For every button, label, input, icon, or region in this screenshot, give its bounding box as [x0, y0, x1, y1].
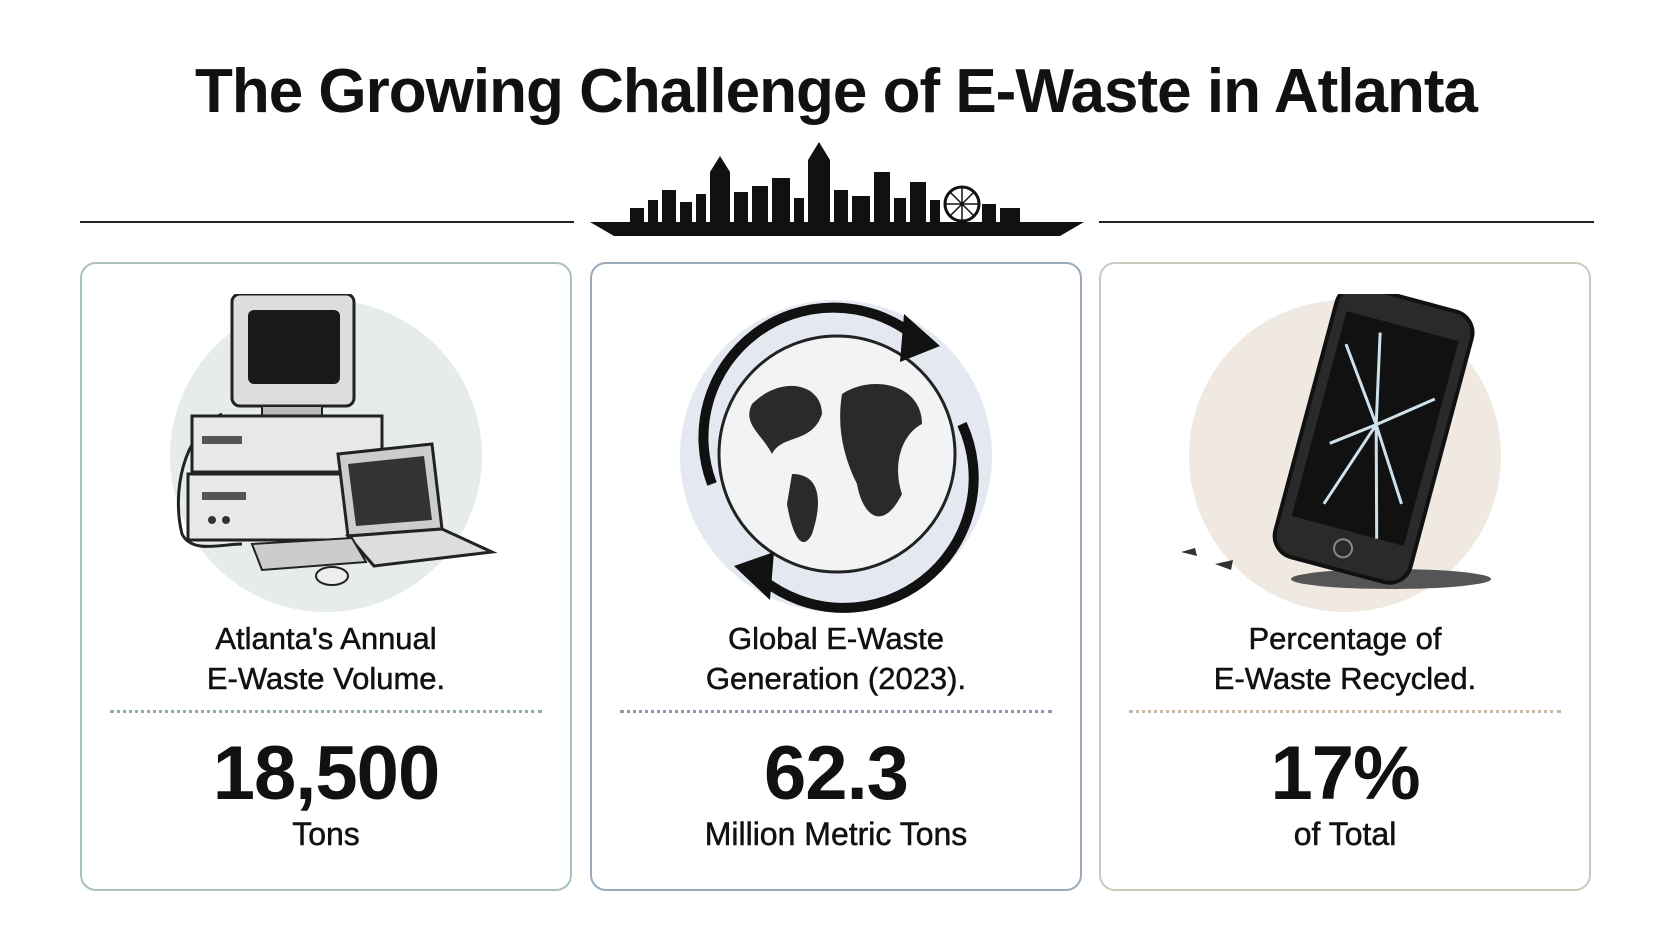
text: label: Percentage of — [1248, 621, 1442, 656]
unit: Million Metric Tons — [705, 816, 967, 852]
panel: Atlanta annual volume — [80, 262, 572, 891]
skyline — [590, 142, 1084, 236]
panel: global generation — [590, 262, 1082, 891]
number: 17% — [1270, 731, 1420, 816]
unit: of Total — [1294, 816, 1396, 852]
text: label: Global E-Waste — [728, 621, 944, 656]
panel: recycled percentage — [1099, 262, 1591, 891]
title: The Growing Challenge of E-Waste in Atlanta — [195, 57, 1477, 126]
text: label: E-Waste Volume. — [207, 661, 445, 696]
text: label — [207, 621, 445, 696]
number: 18,500 — [213, 731, 439, 816]
icon: computers — [176, 294, 498, 586]
text: label — [1214, 621, 1476, 696]
text: label — [706, 621, 966, 696]
text: label: Atlanta's Annual — [215, 621, 437, 656]
unit: Tons — [292, 816, 360, 852]
icon: globe with arrows — [698, 302, 979, 613]
number: 62.3 — [764, 731, 908, 816]
text: label: Generation (2023). — [706, 661, 966, 696]
text: label: E-Waste Recycled. — [1214, 661, 1476, 696]
icon: broken phone — [1181, 294, 1491, 589]
